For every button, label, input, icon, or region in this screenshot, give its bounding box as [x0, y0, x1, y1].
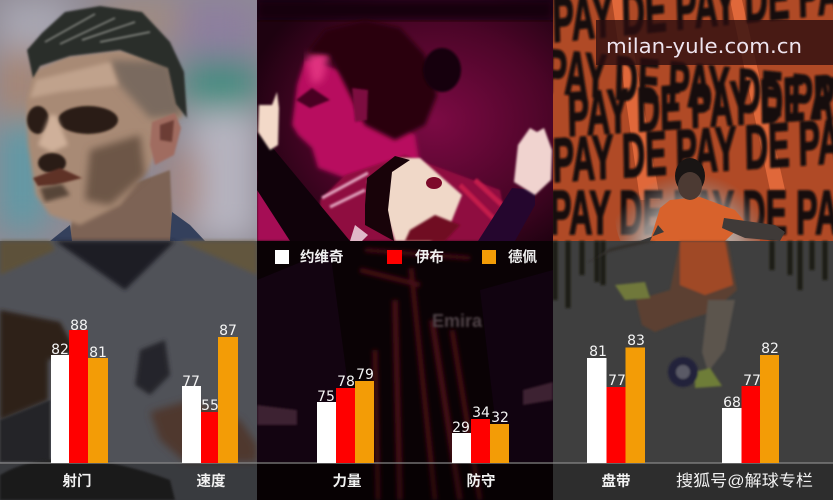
- bar chart: defence: 34: [472, 405, 490, 421]
- bar chart: strength: 75: [317, 389, 335, 405]
- sponsor mark: Emira: [432, 311, 483, 331]
- bar chart: strength: [317, 367, 374, 490]
- hair: [27, 6, 187, 118]
- bar chart: dribbling: [587, 333, 645, 490]
- watermark: milan-yule.com.cn: milan-yule.com.cn: [606, 34, 802, 58]
- bar chart: shooting: 81: [89, 345, 107, 361]
- legend: Ibrahimovic: [387, 248, 444, 266]
- legend: Depay: [482, 248, 537, 266]
- bar chart: dribbling: 77: [608, 373, 626, 389]
- large profile head: [289, 58, 422, 179]
- bar chart: dribbling: 盘带: [602, 472, 630, 490]
- shirt lower: [0, 241, 257, 500]
- dark overlay band: [0, 241, 833, 500]
- small face: [367, 158, 462, 241]
- bar chart: strength: 79: [356, 367, 374, 383]
- arms: [257, 133, 350, 241]
- bar chart: dribbling: 83: [627, 333, 645, 349]
- bar chart: defence: 防守: [466, 472, 496, 490]
- bar chart: shooting: 88: [70, 318, 88, 334]
- face: [26, 50, 183, 225]
- legend: Ibrahimovic: 伊布: [415, 248, 444, 266]
- poster lettering: [545, 0, 833, 248]
- eyes: [58, 106, 118, 134]
- panel: Depay photo: [545, 0, 833, 500]
- bar chart: speed: 87: [219, 323, 237, 339]
- lower grey ground: [553, 241, 833, 500]
- bar chart: passing: 68: [723, 395, 741, 411]
- bar chart: speed: 55: [201, 398, 219, 414]
- panel: Ibrahimovic photo: [257, 0, 553, 500]
- dripping lettering: [555, 241, 825, 308]
- legend: Depay: 德佩: [508, 248, 537, 266]
- neck: [68, 170, 180, 241]
- footballer upper body: [650, 197, 745, 241]
- bar chart: shooting: 射门: [62, 472, 92, 490]
- bar chart: passing: [722, 341, 779, 463]
- smoke glow: [616, 178, 764, 241]
- source watermark: 搜狐号@解球专栏: [676, 472, 813, 490]
- ear: [150, 113, 181, 165]
- bar chart: speed: 77: [182, 374, 200, 390]
- nose and mouth: [38, 115, 68, 152]
- bar chart: dribbling: 81: [589, 344, 607, 360]
- watermark: milan-yule.com.cn: [596, 20, 833, 65]
- bar chart: passing: 77: [743, 373, 761, 389]
- panel: Jovic photo: [0, 0, 257, 500]
- bar chart: shooting: 82: [51, 342, 69, 358]
- collar: [50, 212, 205, 241]
- orange light beams: [612, 0, 785, 200]
- bar chart: defence: 29: [452, 420, 470, 436]
- dark lower jersey: [257, 241, 553, 462]
- bar chart: defence: [452, 405, 509, 490]
- hair and bun: [308, 20, 437, 140]
- bar chart: defence: 32: [491, 410, 509, 426]
- bar chart: strength: 力量: [332, 473, 362, 490]
- legend: [275, 248, 537, 266]
- legend: Jovic: [275, 248, 344, 266]
- jersey: [320, 155, 510, 241]
- bar chart: strength: 78: [337, 374, 355, 390]
- bar chart: passing: 82: [761, 341, 779, 357]
- bar chart: shooting: [51, 318, 108, 490]
- bar chart: speed: [182, 323, 238, 490]
- bar chart: speed: 速度: [196, 472, 226, 490]
- footballer lower body: [587, 241, 737, 388]
- legend: Jovic: 约维奇: [300, 248, 344, 266]
